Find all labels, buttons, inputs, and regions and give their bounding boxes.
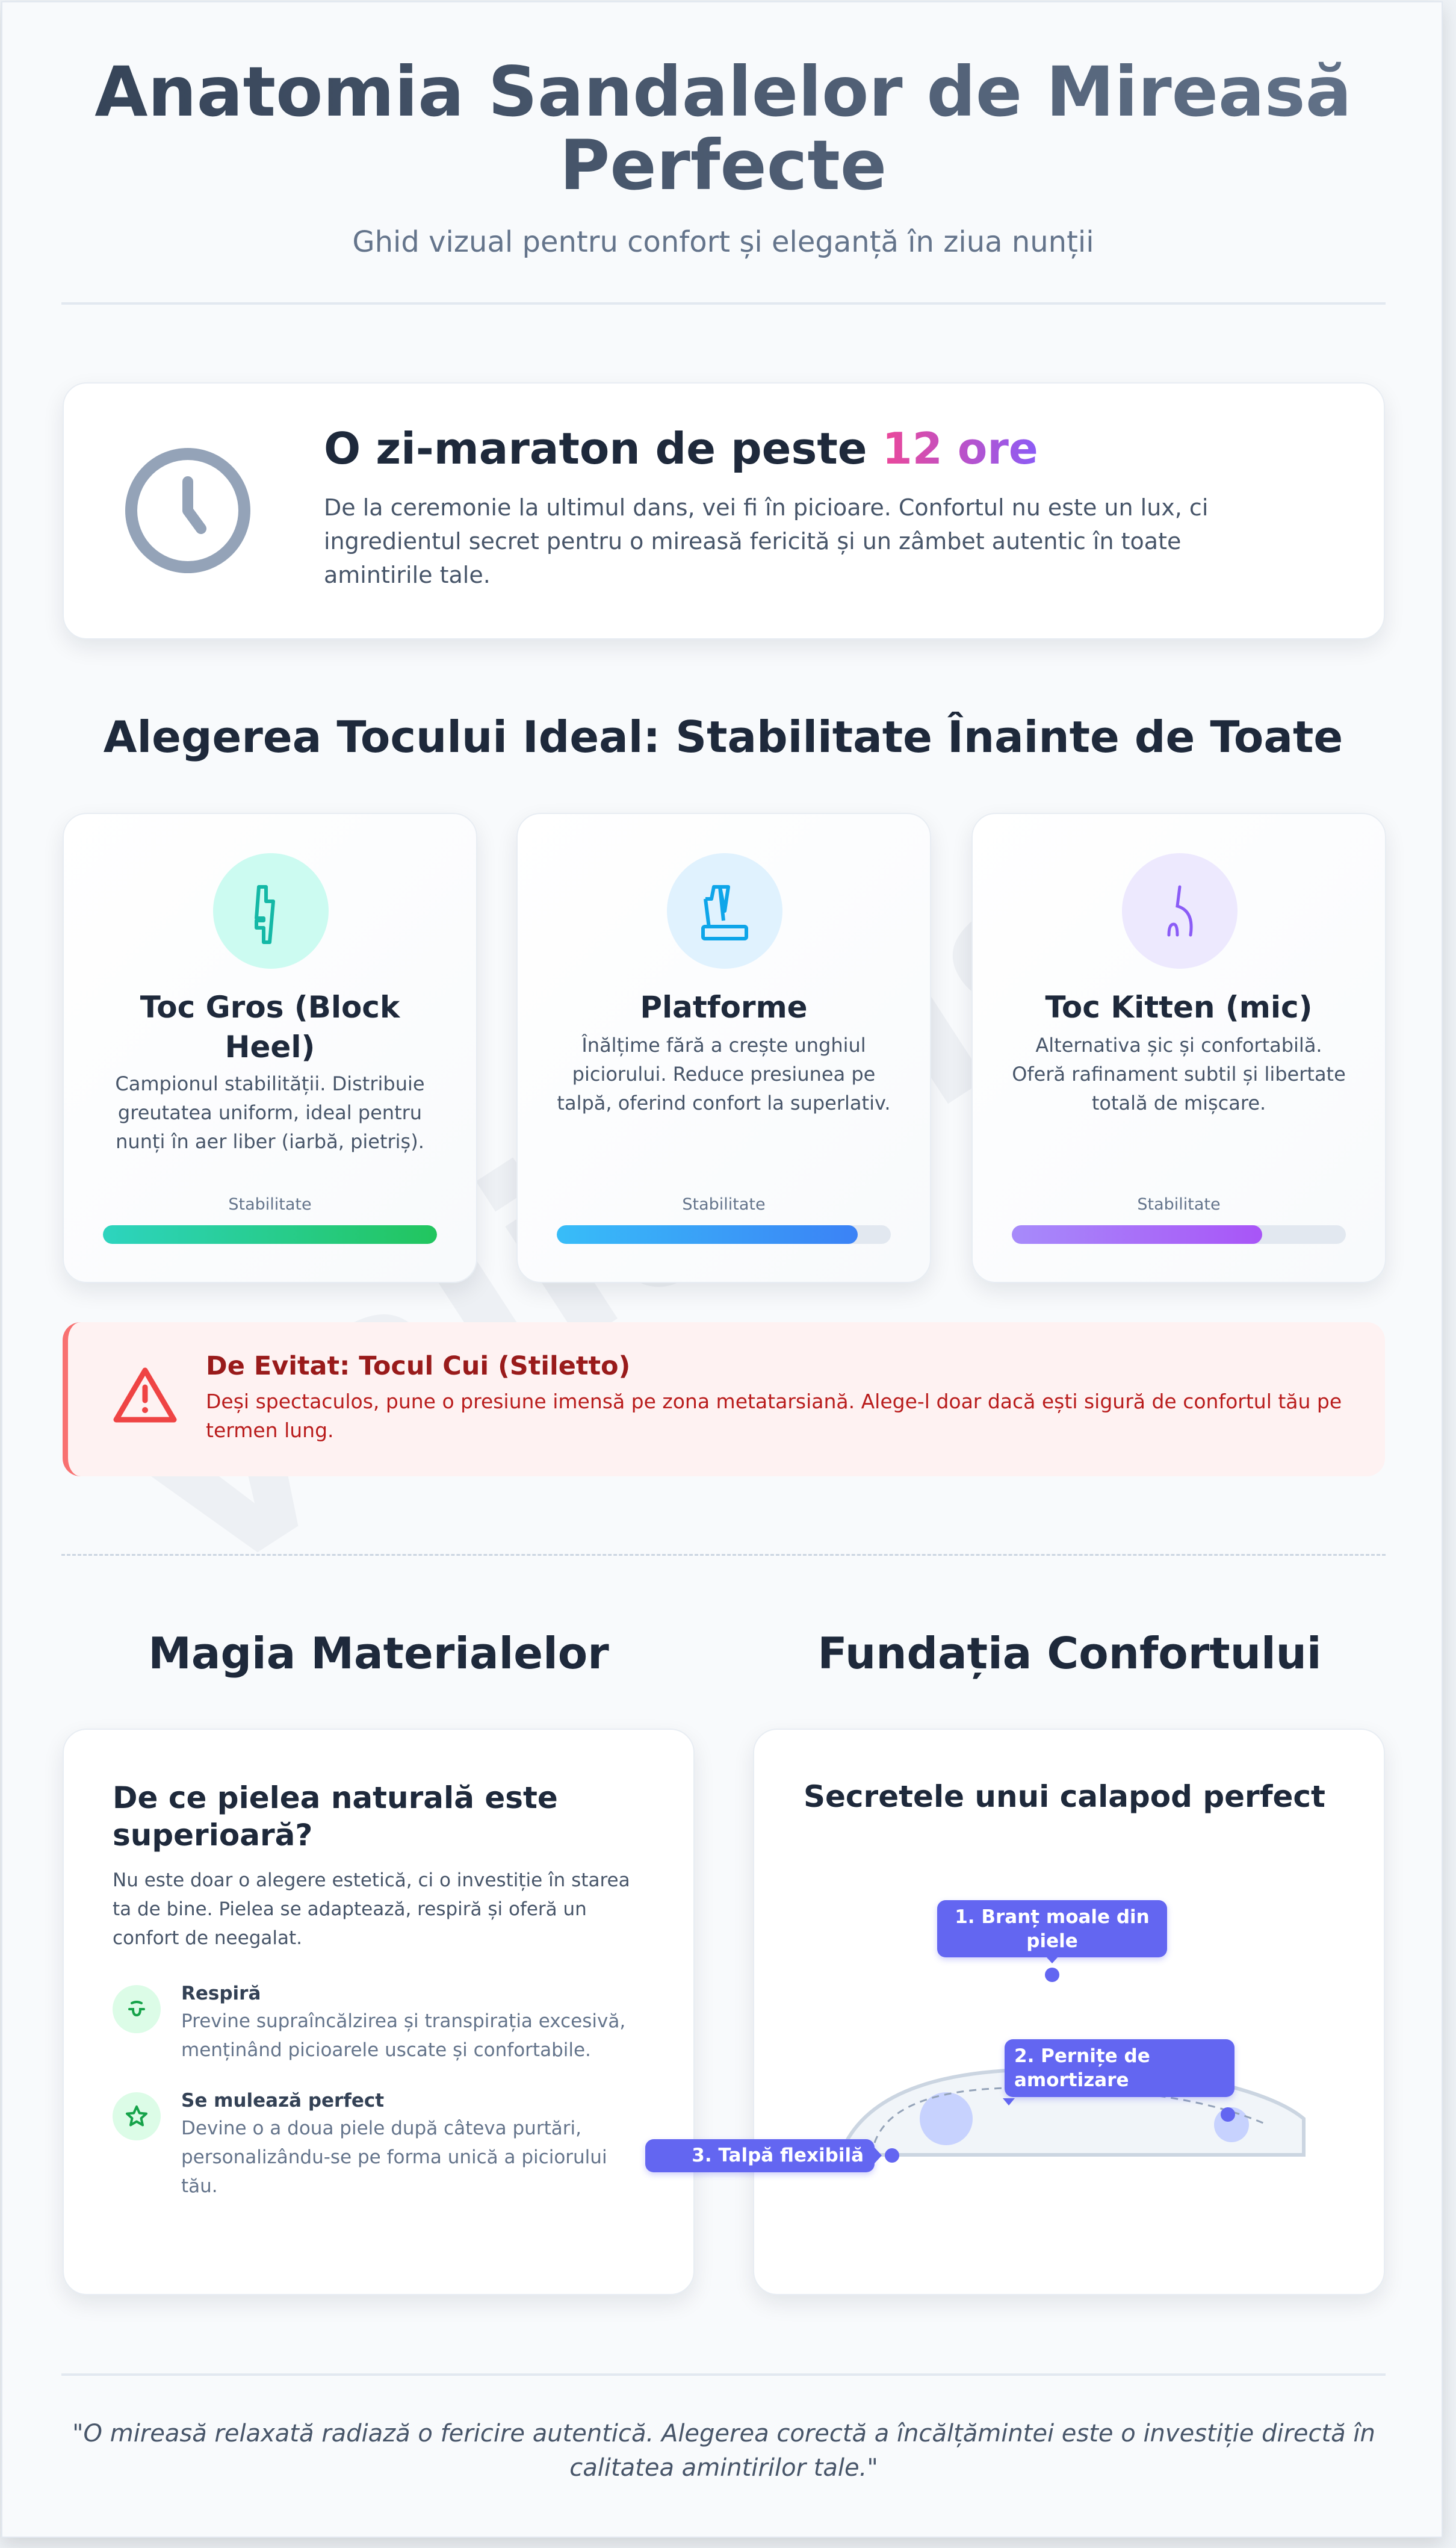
diagram: shoe sole [846, 1957, 1306, 2163]
icon: clock [125, 448, 250, 573]
title [2, 55, 1444, 202]
icon: warning [113, 1368, 177, 1422]
title: Anatomia Sandalelor de Mireasă [94, 52, 1352, 132]
card text: greutatea uniform, ideal pentru [118, 1101, 422, 1124]
footer quote: "O mireasă relaxată radiază o fericire autentică. Alegerea corectă a încălțămintei este o investiție directă în calitatea amintirilor tale." [72, 2420, 1375, 2482]
heading: O zi-maraton de peste 12 ore [324, 423, 1038, 474]
card text [557, 1034, 891, 1114]
card text: nunți în aer liber (iarbă, pietriș). [116, 1130, 424, 1153]
title: Perfecte [560, 125, 887, 205]
card text: Alternativa șic și confortabilă. [1035, 1034, 1322, 1057]
panel heading: Secretele unui calapod perfect [804, 1779, 1325, 1814]
card text: totală de mișcare. [1092, 1092, 1266, 1114]
panel heading: De ce pielea naturală este superioară? [113, 1780, 558, 1853]
card title [140, 990, 401, 1064]
icon: kitten heel [1122, 853, 1238, 969]
panel: platform [516, 813, 931, 1283]
callout: insole [937, 1900, 1167, 1957]
callout: flexible sole: 3. Talpă flexibilă [692, 2145, 864, 2166]
callout: insole: 1. Branț moale din [955, 1906, 1150, 1928]
callout: flexible sole [645, 2139, 875, 2172]
heading: materials: Magia Materialelor [148, 1628, 609, 1679]
card text [115, 1072, 425, 1153]
stability bar: Stabilitate [1137, 1195, 1221, 1214]
card title: Platforme [640, 990, 808, 1025]
callout: insole: piele [1026, 1930, 1078, 1952]
text: De la ceremonie la ultimul dans, vei fi în picioare. Confortul nu este un lux, ci ingredientul secret pentru o mireasă fericită și un zâmbet autentic în toate amintirile tale. [324, 494, 1208, 588]
icon: star [113, 2092, 161, 2140]
card text: Campionul stabilității. Distribuie [115, 1072, 425, 1095]
panel: 12 hour marathon [63, 382, 1385, 639]
panel: comfort foundation [753, 1729, 1385, 2295]
card text: piciorului. Reduce presiunea pe [572, 1063, 875, 1086]
card title: Toc Gros (Block [140, 990, 400, 1025]
intro text: Nu este doar o alegere estetică, ci o investiție în starea ta de bine. Pielea se adaptează, respiră și oferă un confort de neegalat. [113, 1869, 630, 1949]
feature: molds [113, 2090, 607, 2197]
feature: breathes: Respiră [181, 1983, 261, 2004]
panel: block heel [63, 813, 477, 1283]
card text: Oferă rafinament subtil și libertate [1012, 1063, 1346, 1086]
icon: block heel [213, 853, 329, 969]
feature: molds: Se mulează perfect [181, 2090, 384, 2111]
callout: cushions: 2. Pernițe de [1014, 2045, 1150, 2067]
subtitle: Ghid vizual pentru confort și eleganță în ziua nunții [352, 225, 1094, 259]
callout: avoid stiletto [63, 1322, 1385, 1476]
callout: cushions: amortizare [1014, 2069, 1129, 2091]
watermark: valiadis [81, 790, 1162, 1635]
card title: Heel) [225, 1030, 315, 1064]
callout: cushions [1005, 2039, 1235, 2097]
section heading: heel: Alegerea Tocului Ideal: Stabilitate Înainte de Toate [104, 712, 1343, 762]
warning heading: De Evitat: Tocul Cui (Stiletto) [206, 1351, 630, 1381]
card title: Toc Kitten (mic) [1045, 990, 1313, 1025]
panel: kitten heel [971, 813, 1386, 1283]
stability bar: Stabilitate [228, 1195, 312, 1214]
stability bar: Stabilitate [682, 1195, 766, 1214]
feature: breathes: Previne supraîncălzirea și transpirația excesivă, menținând picioarele uscate și confortabile. [181, 2010, 625, 2061]
card text: talpă, oferind confort la superlativ. [557, 1092, 891, 1114]
feature: molds: Devine o a doua piele după câteva purtări, personalizându-se pe forma unică a piciorului tău. [181, 2118, 607, 2197]
heading: comfort: Fundația Confortului [817, 1628, 1322, 1679]
icon: breath [113, 1985, 161, 2033]
feature: breathes [113, 1983, 625, 2061]
icon: platform [667, 853, 782, 969]
card text [1012, 1034, 1346, 1114]
card text: Înălțime fără a crește unghiul [581, 1034, 866, 1057]
panel: leather [63, 1729, 695, 2295]
warning text: Deși spectaculos, pune o presiune imensă pe zona metatarsiană. Alege-l doar dacă ești sigură de confortul tău pe termen lung. [206, 1390, 1342, 1442]
